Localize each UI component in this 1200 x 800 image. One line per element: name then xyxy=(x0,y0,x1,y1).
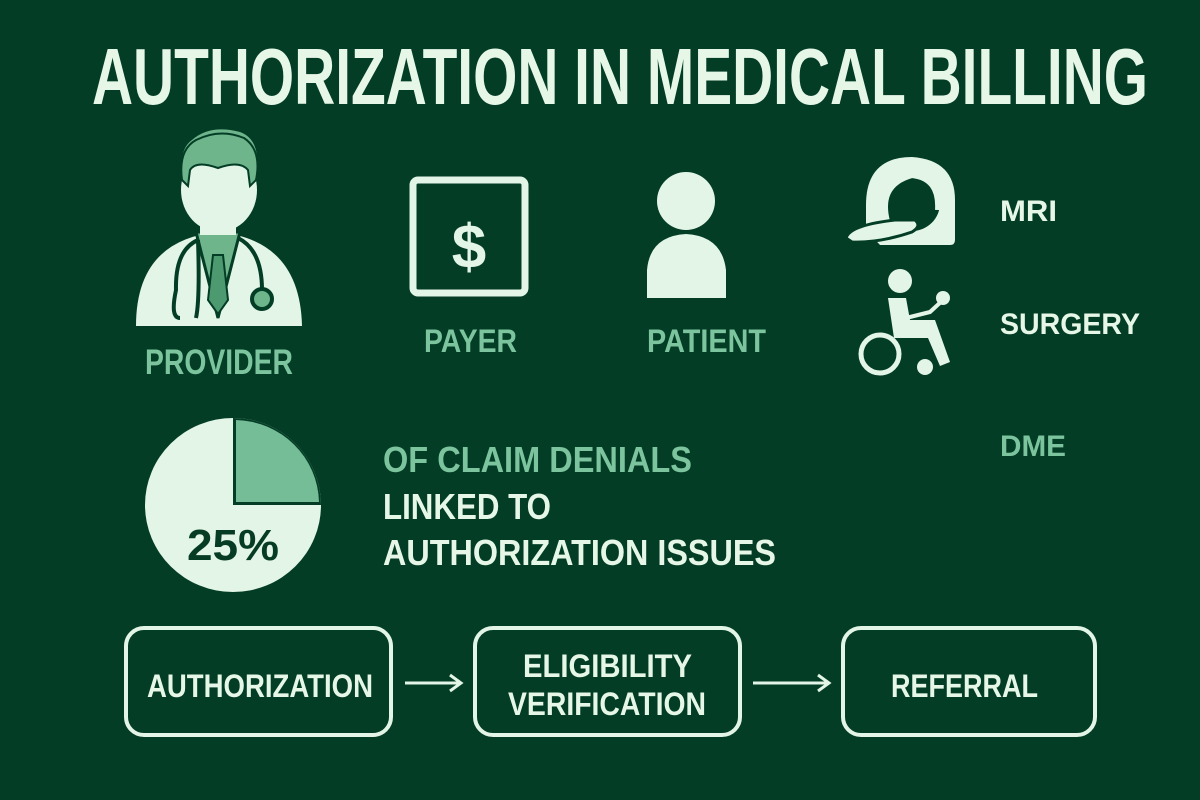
stat text xyxy=(383,439,776,573)
icon: payer dollar box xyxy=(413,180,525,293)
label: DME: DME xyxy=(1000,430,1066,463)
stat text: AUTHORIZATION ISSUES xyxy=(383,532,776,573)
box: authorization xyxy=(126,628,391,735)
icon: payer dollar box: $ xyxy=(452,213,486,282)
icon: provider doctor xyxy=(136,129,302,326)
arrow 1 xyxy=(405,675,461,691)
box: eligibility verification xyxy=(475,628,740,735)
label: provider: PROVIDER xyxy=(145,343,293,382)
box: eligibility verification: VERIFICATION xyxy=(508,686,706,722)
label: MRI: MRI xyxy=(1000,195,1057,228)
box: eligibility verification: ELIGIBILITY xyxy=(523,648,692,684)
label: payer: PAYER xyxy=(424,323,517,359)
label: patient: PATIENT xyxy=(647,323,766,359)
pie chart 25% xyxy=(145,418,321,592)
box: referral: REFERRAL xyxy=(891,668,1038,704)
box: referral xyxy=(843,628,1095,735)
stat text: LINKED TO xyxy=(383,486,551,527)
box: authorization: AUTHORIZATION xyxy=(147,668,373,704)
icon: MRI scanner xyxy=(846,157,955,245)
stat text: OF CLAIM DENIALS xyxy=(383,439,692,480)
icon: patient xyxy=(647,172,726,298)
label: surgery: SURGERY xyxy=(1000,308,1140,341)
icon: wheelchair xyxy=(861,269,950,375)
pie chart 25%: 25% xyxy=(187,521,279,570)
arrow 2 xyxy=(753,675,829,691)
